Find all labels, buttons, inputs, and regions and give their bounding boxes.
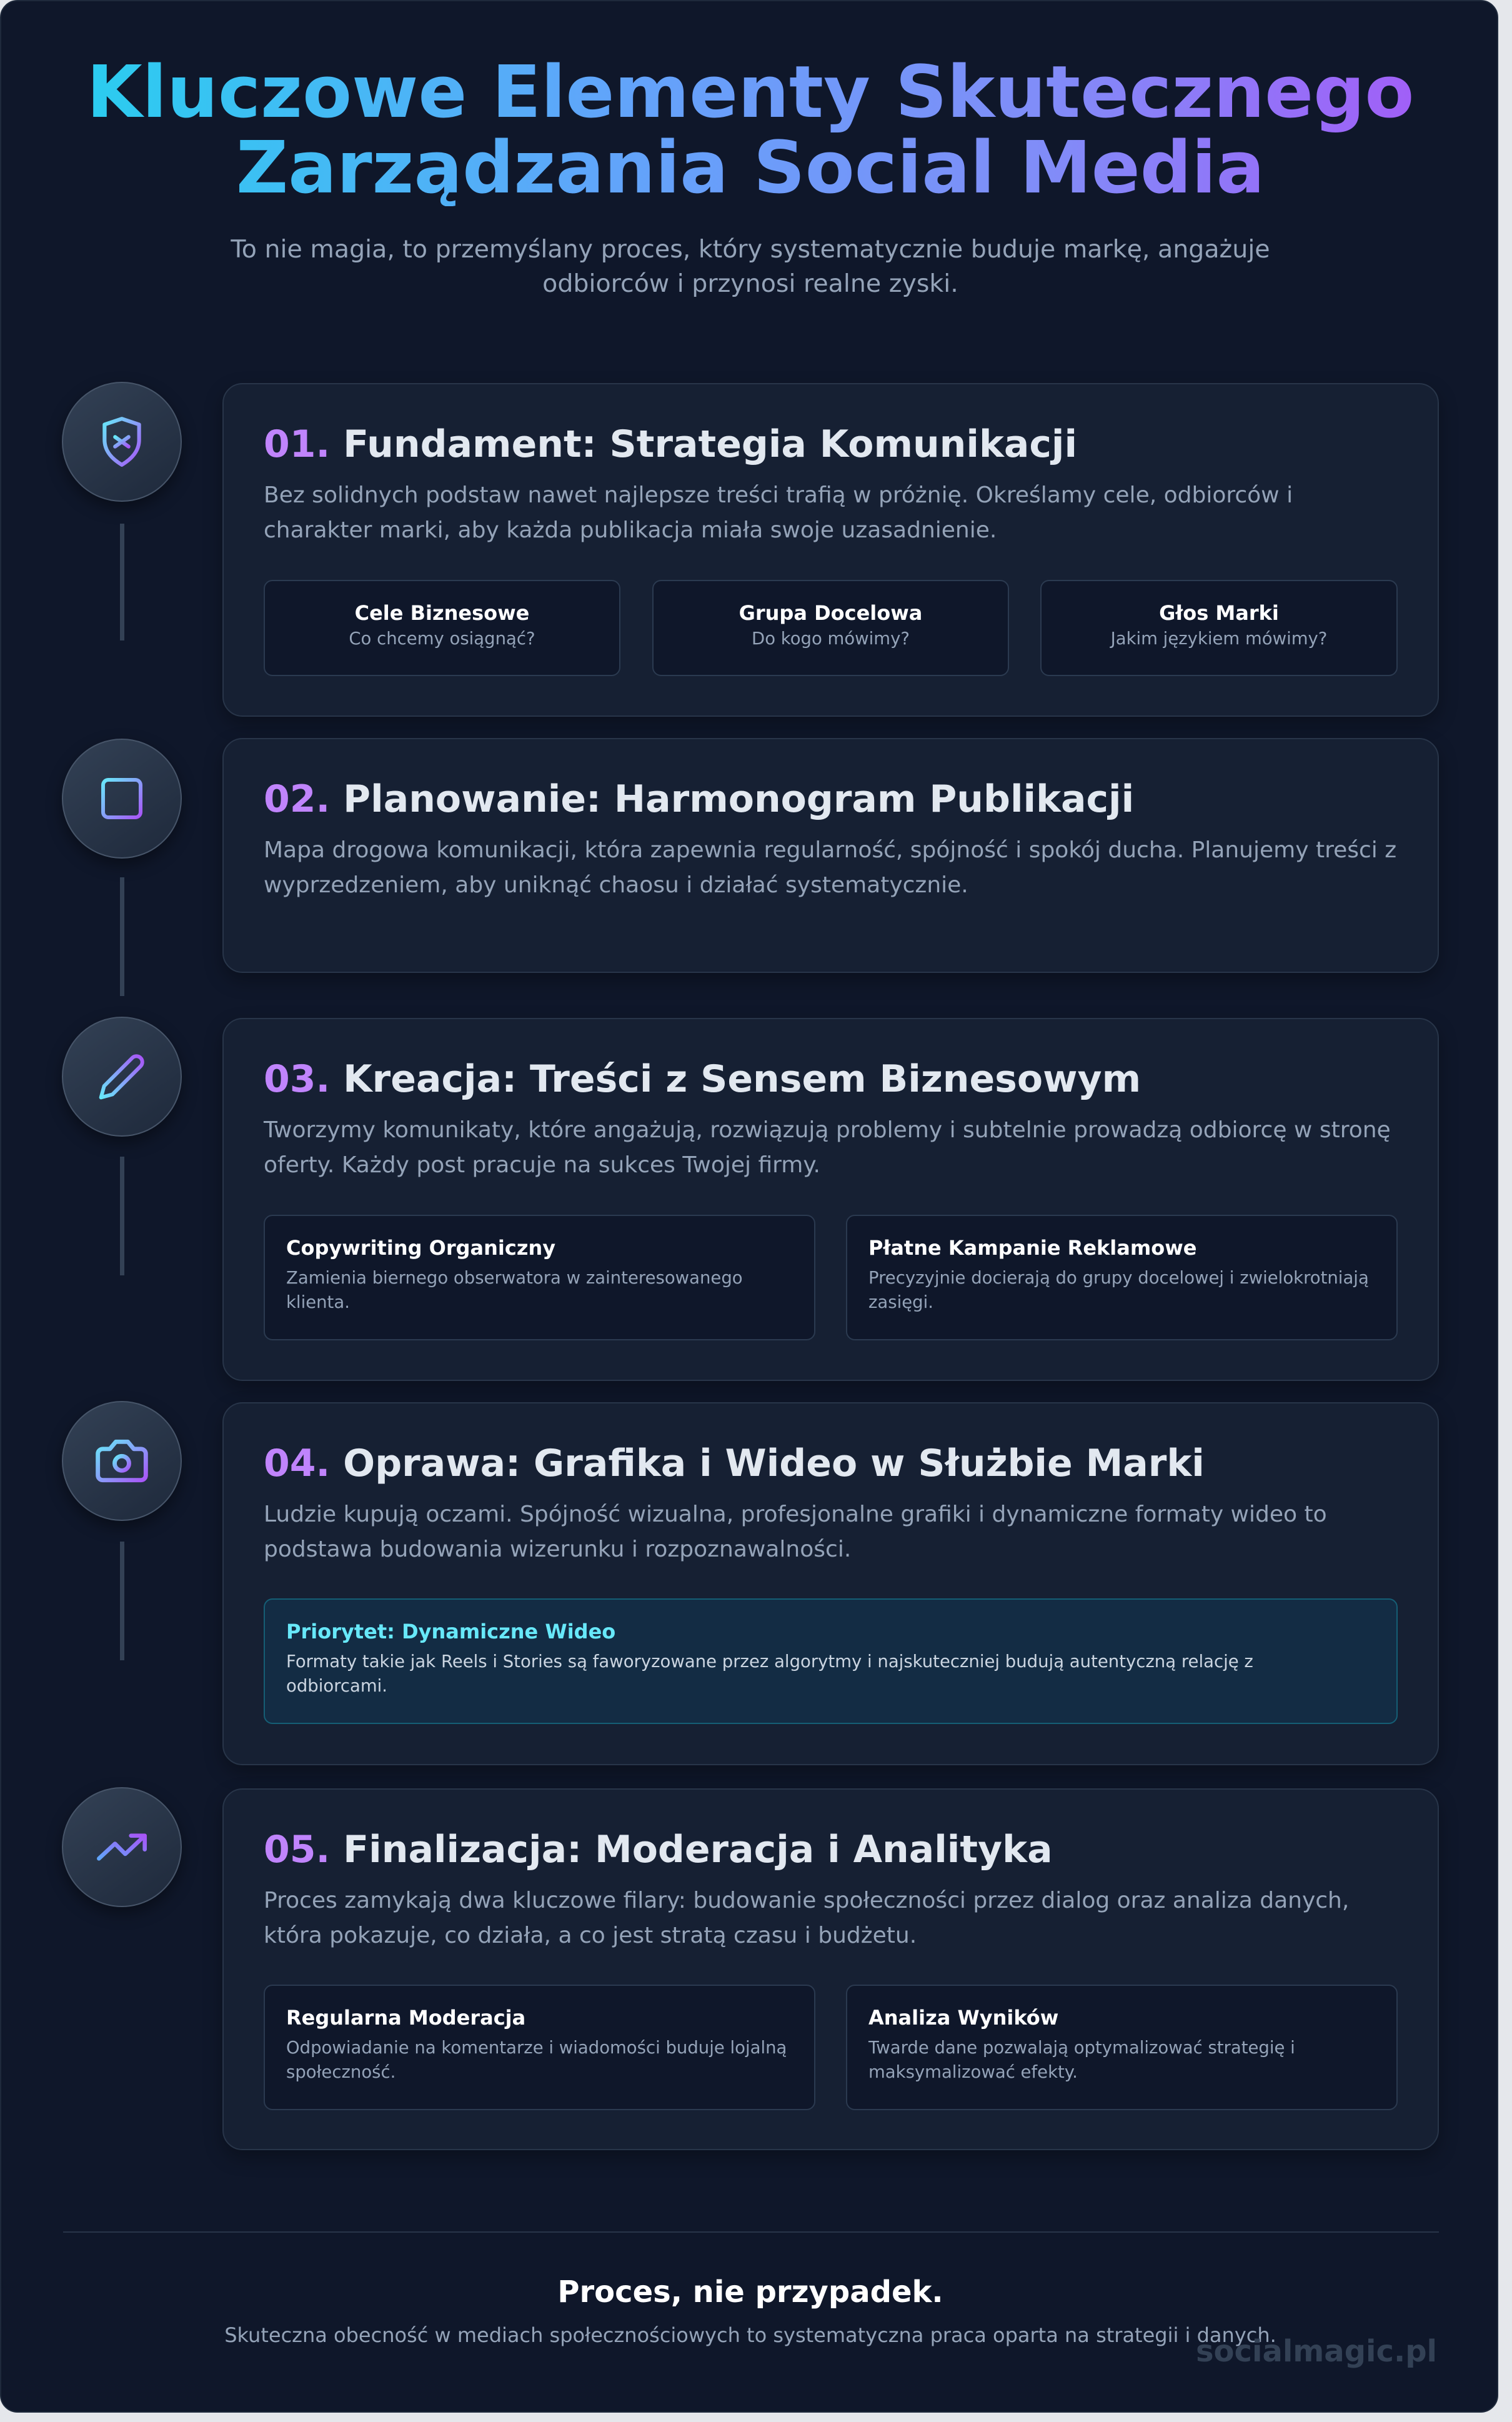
box: copywriting xyxy=(264,1215,815,1340)
box: analiza: Twarde dane pozwalają optymalizować strategię i xyxy=(868,2038,1295,2058)
box: kampanie xyxy=(846,1215,1398,1340)
box: glos xyxy=(1040,580,1398,676)
panel: step 04 xyxy=(222,1402,1439,1765)
box: copywriting: klienta. xyxy=(286,1292,350,1312)
icon: trend step 5 xyxy=(62,1787,182,1907)
box: glos: Głos Marki xyxy=(1159,601,1279,625)
box: copywriting: Zamienia biernego obserwatora w zainteresowanego xyxy=(286,1268,743,1288)
icon: square step 2 xyxy=(62,739,182,859)
panel: step 05 xyxy=(222,1788,1439,2150)
text 04: podstawa budowania wizerunku i rozpoznawalności. xyxy=(264,1537,851,1562)
panel: step 01 xyxy=(222,383,1439,717)
panel: step 02 xyxy=(222,738,1439,973)
connector 2 xyxy=(120,877,124,996)
subtitle: To nie magia, to przemyślany proces, który systematycznie buduje markę, angażuje odbiorców i przynosi realne zyski. xyxy=(231,235,1270,298)
heading 04: 04. Oprawa: Grafika i Wideo w Służbie Marki xyxy=(264,1442,1205,1485)
heading 03: 03. Kreacja: Treści z Sensem Biznesowym xyxy=(264,1057,1141,1101)
text 05: która pokazuje, co działa, a co jest stratą czasu i budżetu. xyxy=(264,1923,917,1948)
text 05: Proces zamykają dwa kluczowe filary: budowanie społeczności przez dialog oraz analiza danych, xyxy=(264,1888,1349,1913)
text 03: oferty. Każdy post pracuje na sukces Twojej firmy. xyxy=(264,1152,820,1178)
box: analiza: maksymalizować efekty. xyxy=(868,2062,1078,2082)
heading 02: 02. Planowanie: Harmonogram Publikacji xyxy=(264,777,1134,821)
text 04: Ludzie kupują oczami. Spójność wizualna, profesjonalne grafiki i dynamiczne formaty wideo to xyxy=(264,1502,1327,1527)
connector 1 xyxy=(120,524,124,640)
connector 4 xyxy=(120,1542,124,1660)
text 04 xyxy=(264,1502,1327,1562)
title xyxy=(1,55,1500,206)
callout: priorytet: odbiorcami. xyxy=(286,1676,387,1696)
icon: shield step 1 xyxy=(62,382,182,502)
watermark: socialmagic.pl xyxy=(1196,2334,1437,2369)
box: cele: Cele Biznesowe xyxy=(355,601,529,625)
box: cele: Co chcemy osiągnąć? xyxy=(349,629,535,649)
icon: pencil step 3 xyxy=(62,1017,182,1137)
box: analiza: Analiza Wyników xyxy=(868,2006,1058,2030)
text 01: charakter marki, aby każda publikacja miała swoje uzasadnienie. xyxy=(264,517,997,543)
text 01: Bez solidnych podstaw nawet najlepsze treści trafią w próżnię. Określamy cele, odbiorców i xyxy=(264,482,1293,508)
box: analiza xyxy=(846,1985,1398,2110)
box: moderacja: społeczność. xyxy=(286,2062,395,2082)
heading 05: 05. Finalizacja: Moderacja i Analityka xyxy=(264,1828,1053,1871)
box: copywriting: Copywriting Organiczny xyxy=(286,1236,555,1260)
box: moderacja xyxy=(264,1985,815,2110)
callout: priorytet: Formaty takie jak Reels i Stories są faworyzowane przez algorytmy i najskuteczniej budują autentyczną relację z xyxy=(286,1652,1253,1672)
callout: priorytet: Priorytet: Dynamiczne Wideo xyxy=(286,1620,615,1643)
box: glos: Jakim językiem mówimy? xyxy=(1111,629,1327,649)
box: grupa: Grupa Docelowa xyxy=(739,601,922,625)
box: grupa xyxy=(652,580,1009,676)
title: Kluczowe Elementy Skutecznego xyxy=(87,51,1414,134)
icon: camera step 4 xyxy=(62,1401,182,1521)
text 01 xyxy=(264,482,1293,543)
text 03: Tworzymy komunikaty, które angażują, rozwiązują problemy i subtelnie prowadzą odbiorcę w stronę xyxy=(264,1117,1391,1143)
connector 3 xyxy=(120,1157,124,1275)
text 02: Mapa drogowa komunikacji, która zapewnia regularność, spójność i spokój ducha. Planujemy treści z xyxy=(264,837,1396,863)
text 05 xyxy=(264,1888,1349,1948)
text 02: wyprzedzeniem, aby uniknąć chaosu i działać systematycznie. xyxy=(264,872,968,898)
heading 01: 01. Fundament: Strategia Komunikacji xyxy=(264,422,1077,466)
text 03 xyxy=(264,1117,1391,1178)
box: moderacja: Regularna Moderacja xyxy=(286,2006,525,2030)
box: grupa: Do kogo mówimy? xyxy=(752,629,910,649)
box: kampanie: Płatne Kampanie Reklamowe xyxy=(868,1236,1196,1260)
box: kampanie: zasięgi. xyxy=(868,1292,933,1312)
title: Zarządzania Social Media xyxy=(236,126,1265,210)
text 02 xyxy=(264,837,1396,898)
box: kampanie: Precyzyjnie docierają do grupy docelowej i zwielokrotniają xyxy=(868,1268,1369,1288)
panel: step 03 xyxy=(222,1018,1439,1381)
callout: priorytet xyxy=(264,1598,1398,1724)
footer text: Skuteczna obecność w mediach społecznościowych to systematyczna praca oparta na strategii i danych. xyxy=(224,2323,1276,2347)
box: cele xyxy=(264,580,620,676)
footer heading: Proces, nie przypadek. xyxy=(557,2275,943,2310)
box: moderacja: Odpowiadanie na komentarze i wiadomości buduje lojalną xyxy=(286,2038,787,2058)
